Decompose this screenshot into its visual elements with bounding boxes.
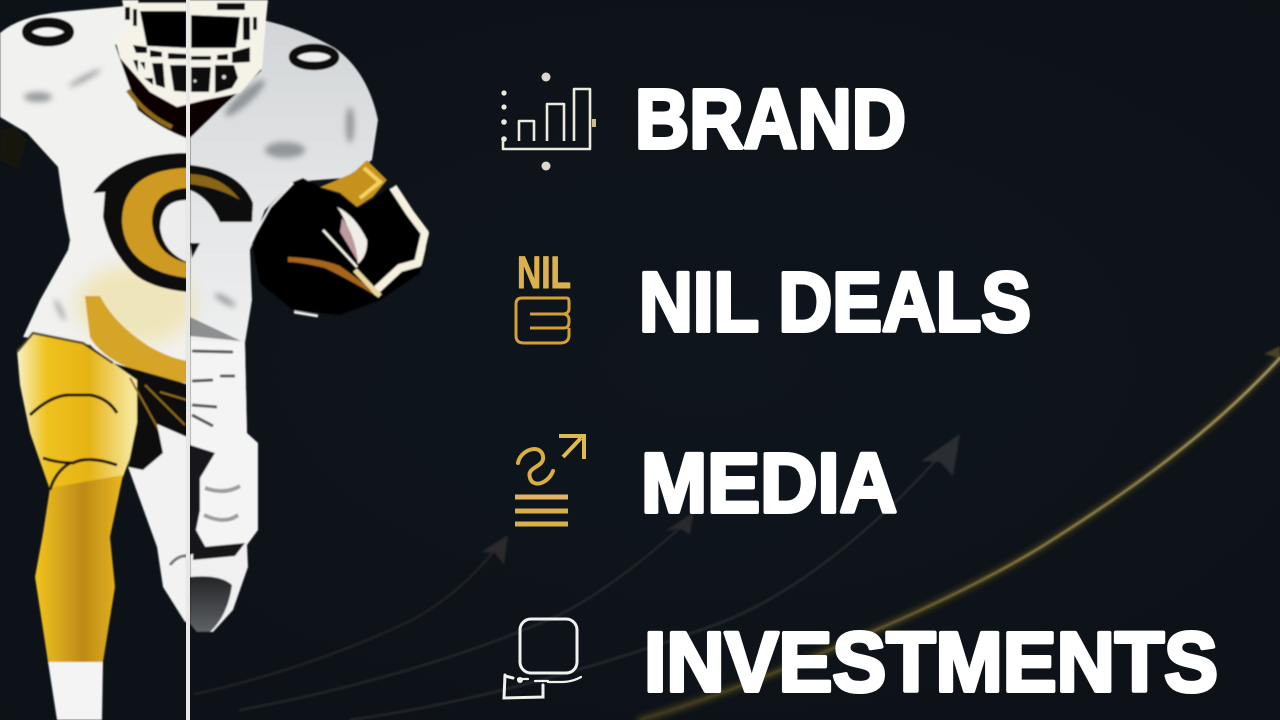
shoulder numeral left: [27, 22, 69, 42]
arrow 3: [350, 434, 960, 720]
white sock: [48, 662, 103, 720]
dark folds between legs: [113, 363, 187, 470]
thigh top seam: [17, 333, 113, 363]
left arm stub: [0, 127, 27, 170]
right shin: [190, 543, 248, 632]
heading: INVESTMENTS: INVESTMENTS: [644, 615, 1218, 709]
right knee: [190, 340, 258, 560]
trailing calf: [128, 424, 187, 622]
knee seams: [30, 395, 117, 490]
faint growth arrows: [195, 346, 1280, 720]
football player: [0, 0, 427, 720]
gold thigh: [17, 333, 137, 490]
torso right half: [190, 20, 378, 433]
arrow 2: [240, 513, 693, 710]
heading: NIL DEALS: NIL DEALS: [639, 255, 1031, 349]
gold belly band: [85, 296, 187, 383]
torso left half: [0, 6, 187, 420]
jersey shadows: [24, 67, 354, 322]
vertical divider line: [186, 0, 190, 720]
icon: media: [515, 436, 584, 524]
arrow 4: gold: [640, 346, 1280, 720]
helmet: [115, 0, 268, 107]
right thigh folds: [190, 317, 241, 341]
icon: NIL deals: NIL: [517, 247, 571, 298]
icon: NIL deals: [516, 247, 571, 343]
gold lower leg: [35, 475, 123, 662]
heading: MEDIA: MEDIA: [641, 436, 897, 530]
icon: investments: [504, 619, 581, 698]
G logo: [93, 153, 253, 292]
icon: bar chart: [501, 72, 596, 170]
lower jersey warm tint: [75, 265, 195, 345]
shoulder numeral right: [293, 48, 335, 66]
wrist band: [320, 160, 387, 207]
neck: [115, 40, 262, 138]
heading: BRAND: BRAND: [635, 72, 906, 166]
arrow 1: [195, 535, 508, 694]
ball and hand: [250, 178, 427, 316]
